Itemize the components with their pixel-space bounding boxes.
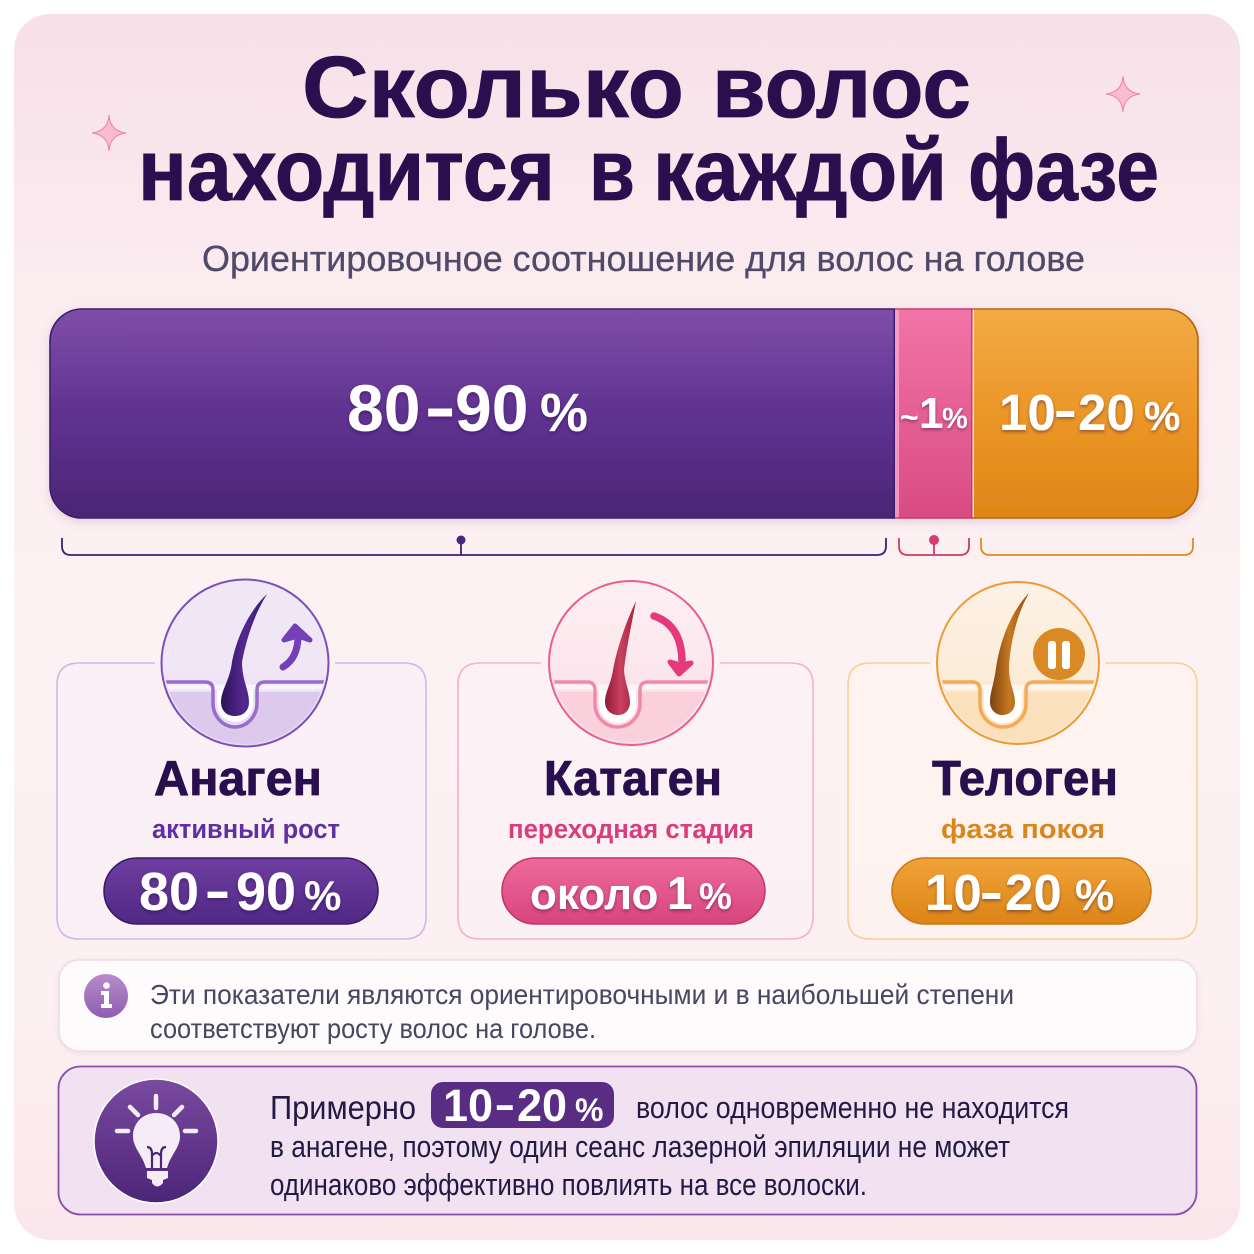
bar label: 10–20 %: – xyxy=(1057,396,1074,429)
takeaway text: волос одновременно не находится xyxy=(636,1090,1069,1125)
bar label: 80–90 %: % xyxy=(540,383,588,443)
sparkle left xyxy=(92,115,126,151)
bracket: catagen xyxy=(899,535,969,555)
bar label: 80–90 %: – xyxy=(429,388,451,432)
card frame xyxy=(848,663,1197,939)
pill: share: 10 xyxy=(925,864,982,921)
highlight badge: 20 xyxy=(517,1080,567,1131)
phase description: переходная стадия xyxy=(508,814,754,844)
pill: share: около xyxy=(530,870,658,919)
subtitle: Ориентировочное соотношение для волос на голове xyxy=(202,238,1085,279)
pill: share: 1 xyxy=(667,867,693,919)
title: каждой xyxy=(653,122,947,219)
bar label: ~1%: ~ xyxy=(900,399,919,435)
takeaway text: Примерно xyxy=(270,1089,416,1126)
bar label: 80–90 %: 80 xyxy=(347,371,420,445)
pill: share: 90 xyxy=(236,862,296,922)
pill: share: 80 xyxy=(139,862,199,922)
bar label: 10–20 %: 20 xyxy=(1078,384,1135,441)
panel: telogen xyxy=(848,582,1197,939)
segment: anagen xyxy=(50,309,896,518)
bracket: telogen xyxy=(981,538,1193,555)
title xyxy=(138,39,1159,219)
segment: telogen xyxy=(973,309,1198,518)
bar label: ~1%: 1 xyxy=(919,389,943,438)
phase name: Анаген xyxy=(154,752,322,806)
icon: info xyxy=(84,974,128,1018)
highlight badge: % xyxy=(575,1092,603,1128)
highlight badge: – xyxy=(497,1090,513,1121)
phase description: фаза покоя xyxy=(941,814,1105,844)
takeaway text: в анагене, поэтому один сеанс лазерной эпиляции не может xyxy=(270,1129,1010,1164)
sparkle right xyxy=(1106,76,1140,112)
bar label: 10–20 %: % xyxy=(1144,393,1180,439)
title: Сколько xyxy=(302,39,684,136)
card frame xyxy=(57,663,426,939)
title: находится xyxy=(138,122,555,219)
info text: Эти показатели являются ориентировочными и в наибольшей степени xyxy=(150,979,1014,1010)
title: волос xyxy=(712,39,971,136)
card frame xyxy=(458,663,813,939)
takeaway text xyxy=(270,1080,1069,1202)
bar label: ~1%: % xyxy=(942,403,968,435)
pill: share: – xyxy=(983,878,1000,911)
pill: share xyxy=(502,858,765,924)
callout: info note xyxy=(59,960,1197,1051)
phase name: Телоген xyxy=(932,752,1118,806)
pill: share xyxy=(104,858,378,924)
icon: hair follicle growing xyxy=(160,579,330,760)
pill: share: % xyxy=(304,872,341,919)
phase name: Катаген xyxy=(544,752,722,806)
callout: key takeaway xyxy=(58,1066,1196,1214)
pill: share: 20 xyxy=(1005,864,1062,921)
stacked bar chart xyxy=(50,309,1198,518)
takeaway text: одинаково эффективно повлиять на все волоски. xyxy=(270,1167,867,1202)
icon: hair follicle transitioning xyxy=(548,580,715,760)
panel: anagen xyxy=(57,579,426,939)
title: фазе xyxy=(968,122,1159,219)
highlight badge: 10 xyxy=(443,1080,493,1131)
highlight badge xyxy=(431,1080,614,1131)
bracket: anagen xyxy=(62,536,886,555)
info text xyxy=(150,979,1014,1044)
pill: share: – xyxy=(208,874,227,912)
bar label: 80–90 %: 90 xyxy=(455,371,528,445)
info text: соответствуют росту волос на голове. xyxy=(150,1013,596,1044)
icon: hair follicle resting xyxy=(936,582,1100,760)
phase description: активный рост xyxy=(152,814,340,844)
bar label: 10–20 %: 10 xyxy=(999,384,1056,441)
segment: catagen xyxy=(895,309,973,518)
pill: share: % xyxy=(699,876,732,917)
icon: light bulb xyxy=(94,1079,218,1203)
pill: share xyxy=(892,858,1151,924)
panel: catagen xyxy=(458,580,813,939)
pill: share: % xyxy=(1075,871,1114,920)
title: в xyxy=(589,122,635,219)
